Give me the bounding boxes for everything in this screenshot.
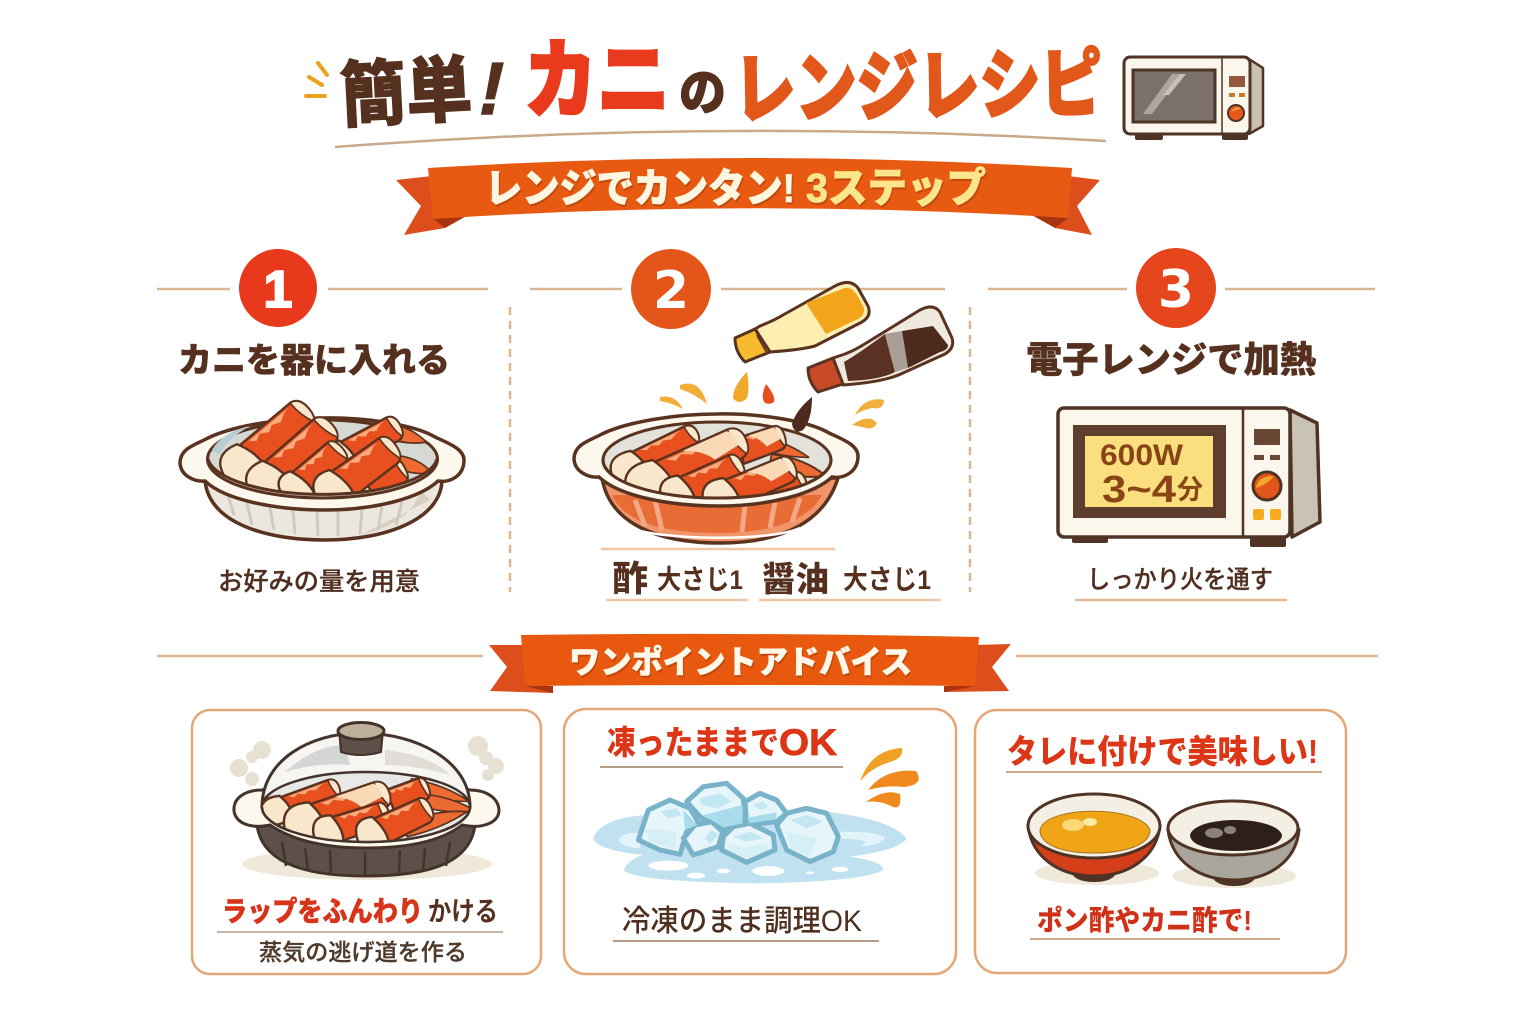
ribbon text: ワンポイントアドバイス <box>569 644 912 680</box>
sauce tip heading: タレに付けで美味しい! <box>1007 733 1318 770</box>
step number 2: 2 <box>653 261 689 321</box>
panel: frozen tip <box>564 709 956 974</box>
panel: sauce tip <box>975 710 1346 973</box>
step 2 ingredients <box>601 549 941 600</box>
wrap tip heading: ラップをふんわり <box>222 896 423 927</box>
ribbon tail left <box>396 176 445 235</box>
icon: small microwave <box>1124 57 1263 140</box>
frozen tip heading: 凍ったままで <box>607 724 779 761</box>
icon: crab dish <box>180 393 464 540</box>
step number 1: 1 <box>264 261 292 319</box>
frozen tip OK: OK <box>779 722 837 763</box>
soy sauce spoon: 大さじ1 <box>843 565 931 595</box>
step number 2 <box>631 249 711 329</box>
step number 1 <box>239 249 317 327</box>
title <box>306 33 1103 137</box>
vinegar spoon: 大さじ1 <box>657 565 743 595</box>
panel: step 2 <box>574 249 953 600</box>
title: の: の <box>679 65 726 121</box>
icon: drops and splashes <box>660 372 884 432</box>
icon: covered dish <box>230 722 504 880</box>
vinegar amount: 酢 <box>612 560 648 599</box>
frozen tip caption: 冷凍のまま調理OK <box>622 905 862 938</box>
panel: step 1 <box>178 249 464 596</box>
title: レンジレシピ: レンジレシピ <box>733 42 1103 133</box>
step 1 heading: カニを器に入れる <box>178 342 450 380</box>
microwave time label: 3~4 <box>1102 469 1176 511</box>
wrap tip caption: 蒸気の逃げ道を作る <box>259 939 467 965</box>
panel: step 3 <box>1026 248 1320 600</box>
ribbon text: レンジでカンタン! <box>485 167 795 211</box>
icon: title sparkle <box>306 63 327 96</box>
step number 3: 3 <box>1158 260 1194 320</box>
sauce tip caption: ポン酢やカニ酢で! <box>1037 905 1252 936</box>
title: exclamation: ! <box>472 47 513 130</box>
step number 3 <box>1136 248 1216 328</box>
ribbon: one point advice <box>489 634 1011 693</box>
microwave time unit: 分 <box>1177 475 1203 505</box>
icon: ice cubes <box>593 783 907 883</box>
microwave power label: 600W <box>1100 439 1184 472</box>
wrap tip heading suffix: かける <box>428 897 498 927</box>
ribbon: 3 steps <box>396 158 1100 235</box>
title underline <box>335 131 1106 147</box>
step 3 caption: しっかり火を通す <box>1087 566 1273 594</box>
title: 簡単: 簡単 <box>338 51 474 137</box>
ribbon text highlight: 3ステップ <box>806 165 986 211</box>
icon: vinegar bottle <box>735 282 869 362</box>
title: カニ: カニ <box>524 33 670 129</box>
panel: wrap tip <box>192 710 541 974</box>
soy sauce amount: 醤油 <box>762 561 829 599</box>
icon: glass dish with crab <box>574 414 858 543</box>
step 1 caption: お好みの量を用意 <box>218 568 420 596</box>
icon: soy sauce bottle <box>808 307 953 392</box>
icon: orange splashes <box>860 748 919 807</box>
step 3 heading: 電子レンジで加熱 <box>1026 339 1316 380</box>
ribbon tail right <box>1055 176 1100 235</box>
icon: ponzu bowl <box>1028 794 1160 885</box>
icon: microwave 600W <box>1058 408 1320 547</box>
icon: soy sauce bowl <box>1168 801 1299 888</box>
